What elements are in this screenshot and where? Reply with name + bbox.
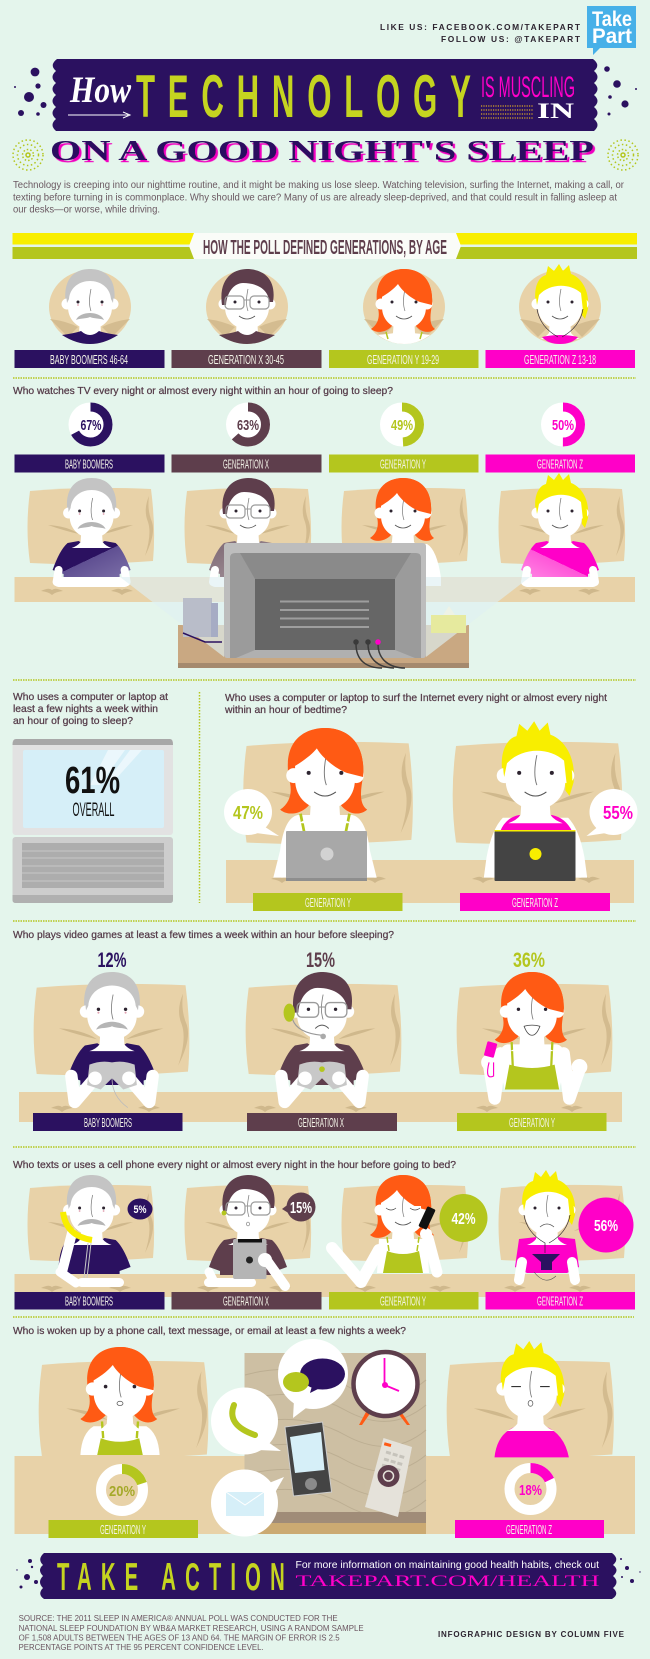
label: generation z 13-18: GENERATION Z 13-18 [524, 353, 596, 367]
label: generation y [329, 1292, 478, 1310]
remote control [365, 1438, 412, 1517]
laptop: 61% overall [12, 739, 173, 903]
label: generation y: GENERATION Y [380, 458, 426, 472]
donut 50% [541, 402, 585, 446]
bubble 47% [224, 789, 279, 836]
books [183, 598, 222, 642]
36%: 36% [513, 949, 545, 972]
person: generation Y with handheld [481, 972, 587, 1099]
logo: TakePart [587, 6, 636, 55]
bubble 56%: 56% [594, 1218, 618, 1235]
portrait: generation Y [363, 269, 445, 344]
bubble 42%: 42% [452, 1211, 476, 1228]
label: generation z 13-18 [486, 350, 635, 368]
label: generation y 19-29 [329, 350, 478, 368]
source note: SOURCE: THE 2011 SLEEP IN AMERICA® ANNUAL POLL WAS CONDUCTED FOR THE [19, 1614, 338, 1623]
question: TV: Who watches TV every night or almost every night within an hour of going to sleep? [13, 385, 393, 397]
source note: NATIONAL SLEEP FOUNDATION BY WB&A MARKET RESEARCH, USING A RANDOM SAMPLE [19, 1624, 364, 1633]
label: generation y [457, 1113, 606, 1131]
take action banner [40, 1553, 616, 1599]
decorative ink drops left [14, 68, 46, 116]
label: generation x 30-45 [172, 350, 322, 368]
bubble: chat [278, 1339, 348, 1418]
source note: PERCENTAGE POINTS AT THE 95 PERCENT CONFIDENCE LEVEL. [19, 1643, 264, 1652]
portrait: generation Z [519, 264, 601, 344]
donut 67% [68, 402, 112, 446]
bed scene: laptop users [224, 721, 638, 903]
bed scene: watching TV [14, 473, 635, 668]
bed scene: woken up [14, 1339, 635, 1536]
label: generation y [329, 454, 478, 472]
bubble: email [211, 1470, 284, 1536]
title banner [52, 59, 598, 131]
nightstand [178, 625, 469, 668]
donut 49% [380, 402, 424, 446]
take action banner: For more information on maintaining good health habits, check out [296, 1560, 599, 1571]
bubble 5%: 5% [134, 1204, 147, 1216]
TV light [120, 577, 530, 657]
laptop: generation Y [286, 831, 367, 881]
label: generation x [172, 1292, 322, 1310]
person: generation X with headset [278, 972, 366, 1102]
question: computer overall: Who uses a computer or laptop at [13, 691, 168, 703]
label: baby boomers [33, 1113, 182, 1131]
label: generation x: GENERATION X [298, 1116, 344, 1130]
title banner: How [69, 70, 131, 111]
label: baby boomers 46-64 [14, 350, 164, 368]
bubble 42% [440, 1194, 488, 1242]
subtitle: ON A GOOD NIGHT'S SLEEP [50, 135, 594, 167]
bubble 15%: 15% [290, 1200, 312, 1217]
person: generation X with tablet [204, 1175, 287, 1287]
label: generation y [48, 1520, 198, 1538]
TV back [224, 543, 426, 668]
label: generation y [253, 893, 402, 911]
label: generation y 19-29: GENERATION Y 19-29 [367, 353, 439, 367]
question: computer overall [13, 691, 168, 727]
label: generation z: GENERATION Z [512, 896, 558, 910]
pillows [34, 984, 612, 1075]
dotted circle right [608, 140, 638, 170]
bed scene: cell phones [14, 1170, 635, 1297]
bubble 15% [282, 1192, 316, 1222]
social links [380, 22, 581, 44]
label: generation y: GENERATION Y [100, 1523, 146, 1537]
donut 63%: 63% [237, 417, 259, 434]
label: generation y: GENERATION Y [380, 1294, 426, 1308]
pillows [28, 1185, 625, 1261]
question: computer bedtime: Who uses a computer or laptop to surf the Internet every night or almost every night [225, 692, 607, 704]
person: baby boomer [53, 478, 131, 587]
person: baby boomer on phone [59, 1175, 131, 1287]
source note [19, 1614, 364, 1652]
pillows [28, 488, 625, 564]
person: generation Y on phone [332, 1175, 437, 1282]
intro text: texting before turning in is commonplace. Why should we care? Many of us are already sleep-deprived, and that could result in falling asleep at [13, 192, 617, 204]
take action banner: TAKE ACTION [57, 1555, 285, 1599]
take action banner: TAKEPART.COM/HEALTH [296, 1573, 600, 1590]
person: generation Z texting [515, 1170, 579, 1280]
label: baby boomers [14, 454, 164, 472]
social links: FOLLOW US: @TAKEPART [441, 34, 581, 44]
bubble 47%: 47% [233, 803, 263, 823]
label: baby boomers 46-64: BABY BOOMERS 46-64 [50, 353, 128, 367]
question: video games: Who plays video games at least a few times a week within an hour before sleeping? [13, 929, 394, 941]
person: generation Y [365, 478, 441, 586]
person: generation X [209, 478, 287, 587]
portrait: generation X [206, 269, 288, 344]
nightstand [244, 1353, 426, 1534]
person: generation Z [521, 473, 599, 587]
donut 18%: 18% [519, 1482, 542, 1499]
person: generation Z with laptop [484, 721, 587, 878]
bubble 5% [128, 1198, 152, 1220]
label: generation y: GENERATION Y [305, 896, 351, 910]
section ribbon: generations by age [12, 233, 637, 259]
donut 50%: 50% [552, 417, 574, 434]
social links: LIKE US: FACEBOOK.COM/TAKEPART [380, 22, 581, 32]
dotted circle left [13, 140, 43, 170]
source note: OF 1,508 ADULTS BETWEEN THE AGES OF 13 AND 64. THE MARGIN OF ERROR IS 2.5 [19, 1634, 340, 1642]
bubble 55%: 55% [603, 803, 633, 823]
12%: 12% [98, 949, 127, 972]
question: cell phones: Who texts or uses a cell phone every night or almost every night in the hour before going to bed? [13, 1159, 456, 1171]
decorative ink drops right [604, 66, 637, 116]
label: generation x [247, 1113, 397, 1131]
label: generation z [455, 1520, 604, 1538]
label: generation z [486, 1292, 635, 1310]
pillows [39, 1361, 614, 1458]
label: generation z: GENERATION Z [537, 458, 583, 472]
ink drops around take action [16, 1558, 641, 1588]
intro text: Technology is creeping into our nighttime routine, and it might be making us lose sleep. Watching television, surfing the Internet, making a call, or [13, 180, 625, 191]
cables [354, 640, 405, 668]
title banner: IN [537, 98, 574, 123]
person: generation Z [494, 1341, 569, 1457]
question: computer overall: an hour of going to sleep? [13, 715, 133, 727]
label: baby boomers [14, 1292, 164, 1310]
donut 18% [510, 1468, 552, 1510]
tissue box [431, 606, 466, 633]
label: generation x: GENERATION X [223, 1294, 269, 1308]
design credit: INFOGRAPHIC DESIGN BY COLUMN FIVE [438, 1630, 625, 1639]
question: computer overall: least a few nights a week within [13, 703, 158, 715]
logo: TakePart: Part [592, 25, 632, 48]
bed scene: video games [19, 972, 622, 1122]
question: woken up: Who is woken up by a phone call, text message, or email at least a few nights a week? [13, 1325, 406, 1337]
person: generation Y with laptop [273, 728, 377, 878]
label: baby boomers: BABY BOOMERS [65, 1294, 113, 1308]
label: generation z: GENERATION Z [537, 1294, 583, 1308]
bubble 55% [586, 789, 638, 836]
person: generation Y [80, 1347, 160, 1455]
intro text: our desks—or worse, while driving. [13, 204, 160, 216]
pillows [243, 742, 622, 844]
question: computer bedtime [224, 692, 607, 716]
label: generation z [460, 893, 610, 911]
15%: 15% [306, 949, 335, 972]
portrait: baby boomers [49, 269, 131, 344]
label: generation x [172, 454, 322, 472]
bubble: phone call [211, 1388, 281, 1454]
label: generation z: GENERATION Z [506, 1523, 552, 1537]
laptop: 61% overall: 61% [65, 760, 120, 802]
label: generation x: GENERATION X [223, 458, 269, 472]
donut 20% [101, 1469, 143, 1511]
label: generation z [486, 454, 635, 472]
question: computer bedtime: within an hour of bedtime? [224, 704, 347, 716]
donut 20%: 20% [109, 1483, 135, 1500]
smartphone [285, 1422, 332, 1496]
label: generation y: GENERATION Y [509, 1116, 555, 1130]
laptop: 61% overall: OVERALL [72, 800, 114, 821]
label: generation x 30-45: GENERATION X 30-45 [208, 353, 284, 367]
intro text [13, 180, 625, 216]
donut 63% [226, 402, 270, 446]
person: baby boomer with controller [68, 972, 156, 1108]
laptop: generation Z [494, 830, 576, 881]
donut 67%: 67% [80, 417, 102, 434]
bubble 56% [578, 1198, 634, 1252]
logo: TakePart: Take [592, 8, 632, 31]
label: baby boomers: BABY BOOMERS [84, 1116, 132, 1130]
donut 49%: 49% [391, 417, 413, 434]
title banner: TECHNOLOGY [136, 64, 471, 131]
alarm clock [354, 1352, 418, 1425]
label: baby boomers: BABY BOOMERS [65, 458, 113, 472]
